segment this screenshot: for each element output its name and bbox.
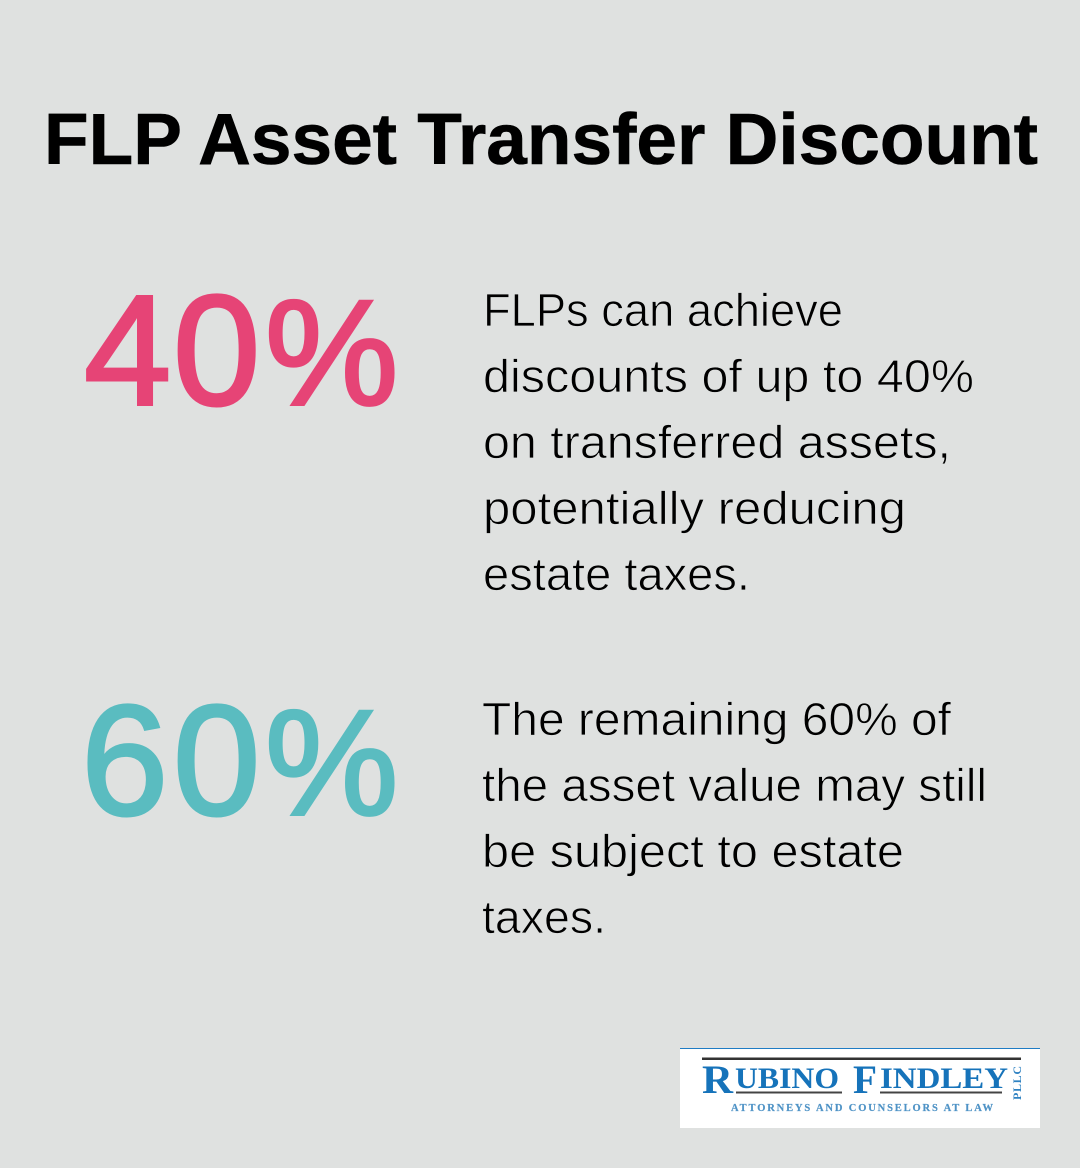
statistic: 40%: % [265, 268, 398, 436]
logo: Rubino Findley PLLC: R [702, 1057, 734, 1102]
logo: Rubino Findley PLLC: F [853, 1057, 877, 1102]
statistic: 60%: % [265, 678, 398, 846]
logo: Rubino Findley PLLC [680, 1048, 1040, 1128]
text block: 40% description: on transferred assets, [483, 416, 951, 468]
text block: 60% description: The remaining 60% of [482, 693, 951, 745]
text block: 40% description: estate taxes. [483, 548, 750, 600]
logo: Rubino Findley PLLC: UBINO [735, 1062, 839, 1095]
statistic: 40%: 40 [84, 264, 260, 438]
text block: 40% description: potentially reducing [483, 482, 906, 534]
text block: 60% description: be subject to estate [482, 825, 904, 877]
text block: 40% description [483, 284, 974, 600]
text block: 40% description: FLPs can achieve [483, 284, 843, 336]
statistic: 60%: 60 [81, 674, 260, 848]
text block: 60% description: the asset value may still [482, 759, 987, 811]
logo: Rubino Findley PLLC: ATTORNEYS AND COUNSELORS AT LAW [731, 1103, 994, 1114]
logo: Rubino Findley PLLC: INDLEY [880, 1062, 1008, 1095]
logo: Rubino Findley PLLC: PLLC [1010, 1066, 1024, 1100]
text block: 40% description: discounts of up to 40% [483, 350, 974, 402]
title: FLP Asset Transfer Discount [44, 100, 1038, 180]
text block: 60% description: taxes. [482, 891, 606, 943]
text block: 60% description [482, 693, 987, 943]
